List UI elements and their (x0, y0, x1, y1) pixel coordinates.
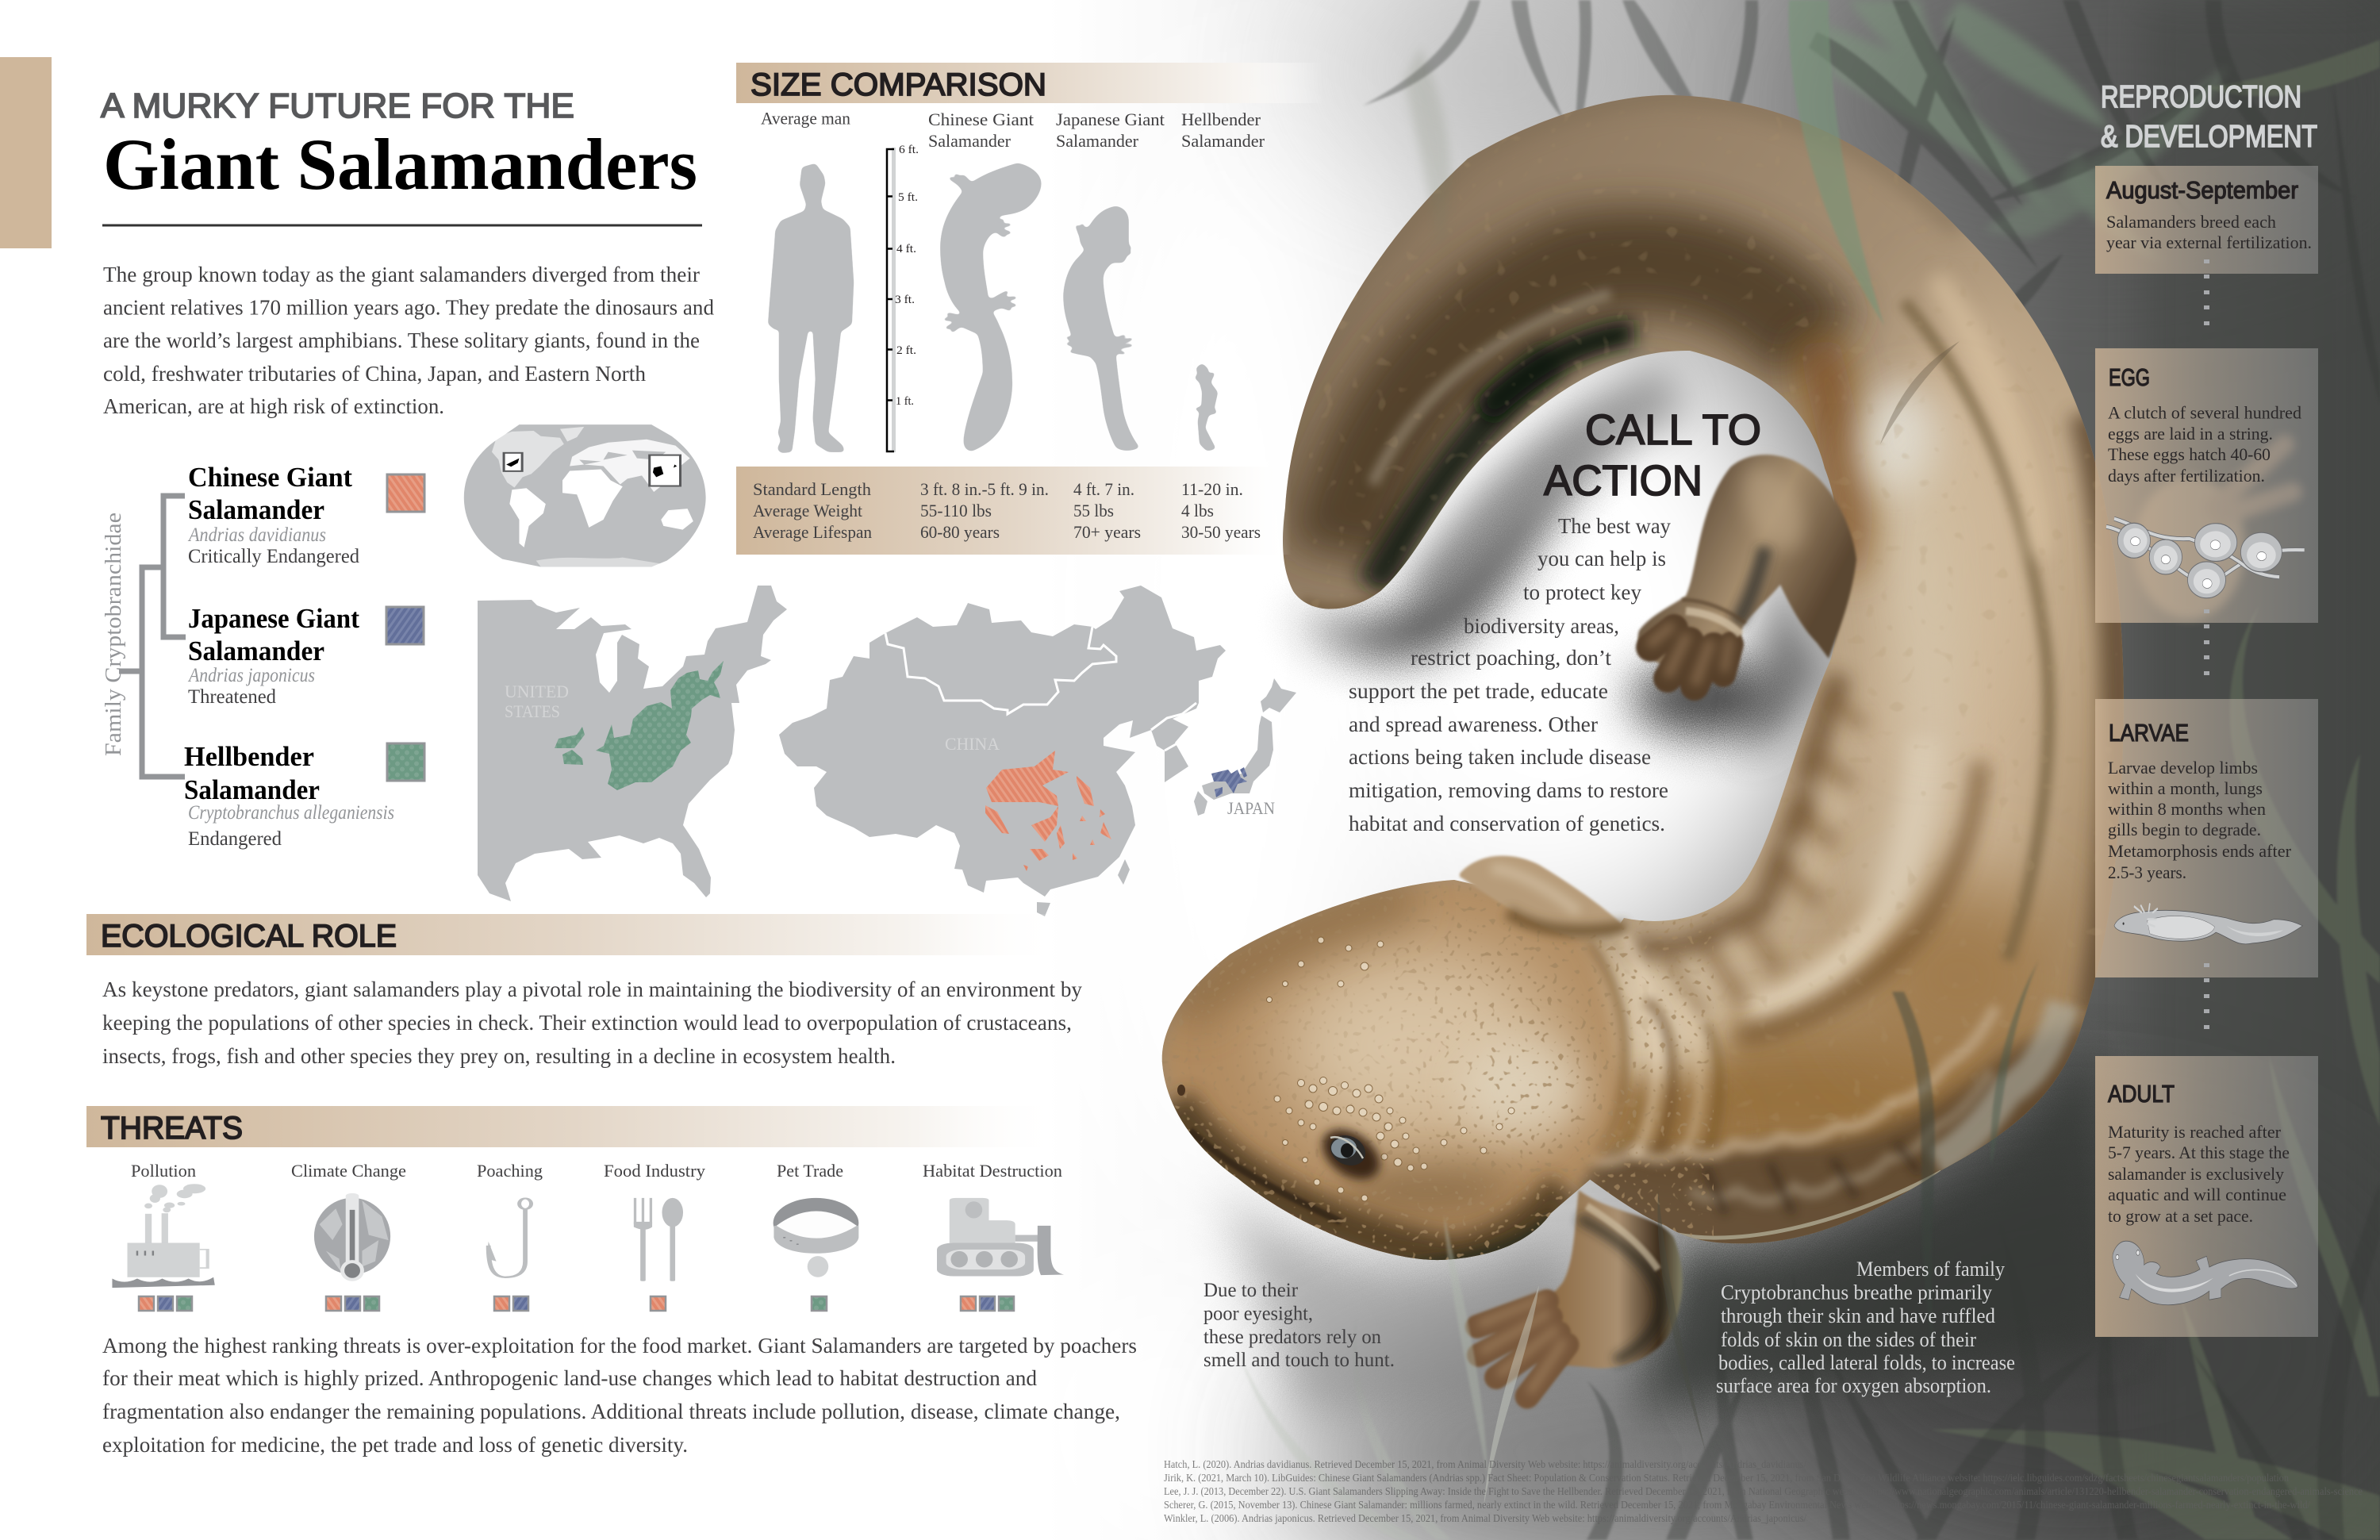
reproduction heading: REPRODUCTION (2101, 80, 2301, 114)
panel: Larvae: LARVAE (2109, 719, 2189, 747)
species: Hellbender Salamander: Salamander (184, 774, 320, 805)
head speckles (1142, 857, 1714, 1269)
panel: Larvae: Metamorphosis ends after (2108, 841, 2292, 861)
callout: lateral folds: Members of family (1856, 1258, 2005, 1281)
size statistics table: 3 ft. 8 in.-5 ft. 9 in. (920, 479, 1049, 499)
icon: fork and spoon (634, 1198, 683, 1281)
icon: collar (774, 1198, 858, 1277)
size comparison column labels: Japanese Giant (1056, 109, 1165, 129)
species: Japanese Giant Salamander: Andrias japonicus (187, 665, 315, 686)
foreground translucent grass (1404, 0, 2039, 1507)
panel: Egg (2095, 348, 2318, 623)
species: Japanese Giant Salamander: Threatened (188, 686, 276, 708)
icon: pollution factory (112, 1184, 215, 1288)
threats paragraph: Among the highest ranking threats is over-exploitation for the food market. Giant Salamanders are targeted by poachers (102, 1334, 1137, 1358)
intro paragraph: are the world’s largest amphibians. These solitary giants, found in the (103, 328, 700, 352)
species: Japanese Giant Salamander: Salamander (188, 636, 324, 666)
ecological role paragraph: As keystone predators, giant salamanders play a pivotal role in maintaining the biodiversity of an environment by (102, 977, 1082, 1001)
species: Chinese Giant Salamander: Andrias davidianus (187, 524, 326, 546)
call to action text: habitat and conservation of genetics. (1349, 812, 1665, 835)
height scale: 1 ft. (896, 395, 914, 408)
section heading: threats (86, 1106, 1062, 1147)
call to action heading (1544, 406, 1761, 505)
height scale (887, 144, 919, 452)
height scale: 4 ft. (896, 243, 916, 255)
height scale: 5 ft. (898, 191, 918, 204)
panel: August-September: year via external fertilization. (2106, 232, 2312, 252)
dark inner band along tail arc (1341, 261, 1817, 555)
callout: lateral folds: Cryptobranchus breathe primarily (1721, 1281, 1992, 1304)
Chinese giant salamander range (985, 751, 1111, 871)
background grass blades (1238, 0, 2380, 1540)
map: eastern United States: STATES (505, 701, 560, 721)
head shading (1162, 880, 1620, 1260)
silhouette: Hellbender (1192, 363, 1218, 451)
references (1164, 1459, 2363, 1525)
callout: eyesight: Due to their (1203, 1280, 1299, 1301)
icon: egg string (2106, 519, 2305, 598)
height scale: 6 ft. (899, 144, 919, 156)
icon: larva (2114, 903, 2302, 944)
size statistics table: Average Lifespan (753, 522, 872, 542)
panel: Adult (2095, 1056, 2318, 1337)
panel: August-September: August-September (2106, 176, 2298, 204)
size comparison column labels: Hellbender (1181, 109, 1261, 129)
size statistics table: 11-20 in. (1181, 479, 1243, 499)
silhouette: Japanese giant salamander (1063, 206, 1139, 451)
intro paragraph: ancient relatives 170 million years ago. They predate the dinosaurs and (103, 295, 714, 319)
shoulder lump (1460, 856, 1626, 938)
map: China (779, 586, 1226, 916)
call to action text: to protect key (1523, 581, 1641, 605)
shadows beneath salamander (1222, 389, 2126, 1412)
rear leg (1477, 1190, 1683, 1396)
size statistics table: 4 ft. 7 in. (1073, 479, 1134, 499)
ecological role paragraph (102, 977, 1082, 1068)
threat labels: Pet Trade (777, 1161, 843, 1181)
map: China: CHINA (945, 734, 1000, 754)
threats paragraph (102, 1334, 1137, 1457)
size statistics table: 55 lbs (1073, 501, 1114, 520)
size comparison column labels: Chinese Giant (928, 109, 1034, 129)
panel: Adult: Maturity is reached after (2108, 1122, 2282, 1142)
intro paragraph (103, 263, 714, 418)
left tan accent block (0, 57, 52, 248)
call to action text: The best way (1558, 514, 1671, 538)
Hellbender range (555, 661, 724, 790)
light warts around the eye (1266, 937, 1514, 1201)
map: eastern United States (478, 586, 787, 901)
reproduction heading: & DEVELOPMENT (2101, 120, 2317, 154)
species: Hellbender Salamander: Hellbender (184, 741, 314, 772)
panel: Egg: eggs are laid in a string. (2108, 424, 2273, 444)
section heading: ecological role (86, 914, 1062, 955)
map: Japan (1194, 678, 1296, 818)
panel: August-September: Salamanders breed each (2106, 212, 2276, 232)
threats paragraph: fragmentation also endanger the remaining populations. Additional threats include pollution, disease, climate change, (102, 1400, 1120, 1423)
size statistics table: 4 lbs (1181, 501, 1214, 520)
size comparison column labels: Salamander (1181, 131, 1265, 151)
references: Winkler, L. (2006). Andrias japonicus. Retrieved December 15, 2021, from Animal Diversity Web website: https://animaldiversity.org/accounts/Andrias_japonicus/ (1164, 1513, 1806, 1525)
references: Hatch, L. (2020). Andrias davidianus. Retrieved December 15, 2021, from Animal Diversity Web website: https://animaldiversity.org/accounts/Andrias_davidianus/ (1164, 1459, 1806, 1471)
height scale: 3 ft. (895, 294, 915, 306)
size statistics table (736, 467, 1292, 555)
threat species swatches (139, 1296, 1014, 1311)
threat labels: Climate Change (291, 1161, 406, 1181)
family tree bracket: Family Cryptobranchidae (101, 513, 126, 756)
section heading: size comparison: SIZE COMPARISON (750, 67, 1046, 102)
section heading: size comparison (736, 63, 1323, 103)
species: Hellbender Salamander (184, 741, 424, 850)
silhouette: average man (768, 163, 854, 453)
section heading: ecological role: ECOLOGICAL ROLE (101, 919, 397, 954)
panel: Larvae: within 8 months when (2108, 799, 2266, 819)
nostril (1177, 1085, 1185, 1096)
panel: Adult: salamander is exclusively (2108, 1164, 2284, 1184)
size statistics table: 55-110 lbs (920, 501, 992, 520)
ruffled lateral folds (1634, 674, 1841, 948)
family tree bracket (101, 496, 186, 777)
panel: Larvae: within a month, lungs (2108, 778, 2263, 798)
icon: bulldozer (937, 1198, 1064, 1276)
call to action text: and spread awareness. Other (1349, 712, 1598, 736)
panel: Adult: ADULT (2108, 1080, 2175, 1108)
salamander body and head (1161, 95, 2124, 1260)
map: eastern United States: UNITED (505, 682, 569, 701)
panel: Larvae: 2.5-3 years. (2108, 862, 2186, 882)
front leg (1638, 455, 1856, 686)
threats paragraph: for their meat which is highly prized. Anthropogenic land-use changes which lead to habitat destruction and (102, 1366, 1037, 1390)
call to action text: mitigation, removing dams to restore (1349, 778, 1668, 802)
intro paragraph: cold, freshwater tributaries of China, Japan, and Eastern North (103, 362, 647, 386)
intro paragraph: American, are at high risk of extinction. (103, 394, 444, 418)
map: Japan: JAPAN (1227, 798, 1275, 818)
size statistics table: Standard Length (753, 479, 871, 499)
callout: lateral folds (1716, 1258, 2015, 1397)
panel: August-September (2095, 166, 2318, 274)
panel: Egg: days after fertilization. (2108, 466, 2265, 486)
size comparison column labels: Salamander (928, 131, 1012, 151)
species: Chinese Giant Salamander: Salamander (188, 494, 324, 525)
panel: Egg: EGG (2109, 363, 2150, 391)
call to action text: you can help is (1537, 547, 1666, 570)
call to action heading: CALL TO (1585, 406, 1761, 454)
title: Giant Salamanders (103, 124, 697, 205)
timeline dots (2204, 259, 2209, 1029)
ecological role paragraph: insects, frogs, fish and other species they prey on, resulting in a decline in ecosystem health. (102, 1044, 896, 1068)
size statistics table: 30-50 years (1181, 522, 1261, 542)
size comparison column labels (761, 108, 1265, 151)
call to action text: restrict poaching, don’t (1411, 646, 1612, 670)
call to action text (1349, 514, 1671, 835)
threat labels (131, 1161, 1062, 1181)
panel: Adult: to grow at a set pace. (2108, 1206, 2253, 1226)
size statistics table: 60-80 years (920, 522, 1000, 542)
icon: fish hook (487, 1199, 532, 1277)
title: A MURKY FUTURE FOR THE (101, 86, 574, 125)
far rear foot seen through egg panel (2134, 444, 2293, 619)
threat labels: Habitat Destruction (923, 1161, 1062, 1181)
panel: Adult: 5-7 years. At this stage the (2108, 1143, 2290, 1162)
threat labels: Pollution (131, 1161, 196, 1181)
species: Chinese Giant Salamander (187, 462, 424, 567)
threats paragraph: exploitation for medicine, the pet trade and loss of genetic diversity. (102, 1433, 688, 1457)
size comparison column labels: Salamander (1056, 131, 1139, 151)
intro paragraph: The group known today as the giant salamanders diverged from their (103, 263, 700, 286)
call to action text: actions being taken include disease (1349, 745, 1651, 769)
eye (1313, 1119, 1389, 1189)
species: Japanese Giant Salamander: Japanese Giant (188, 603, 359, 634)
species: Hellbender Salamander: Endangered (188, 828, 282, 850)
silhouette: Chinese giant salamander (940, 163, 1041, 451)
threat labels: Food Industry (604, 1161, 705, 1181)
illustration: giant salamander (1111, 63, 2158, 1396)
section heading: threats: THREATS (101, 1111, 243, 1146)
ecological role paragraph: keeping the populations of other species in check. Their extinction would lead to overpopulation of crustaceans, (102, 1011, 1072, 1035)
call to action text: support the pet trade, educate (1349, 679, 1608, 703)
title (101, 86, 702, 227)
icon: adult salamander (2113, 1241, 2297, 1305)
outer edge shading (1285, 95, 1960, 508)
callout: eyesight: these predators rely on (1203, 1327, 1381, 1348)
callout: lateral folds: folds of skin on the sides of their (1721, 1328, 1976, 1351)
callout: eyesight: smell and touch to hunt. (1203, 1350, 1395, 1371)
height scale: 2 ft. (896, 344, 916, 357)
callout: lateral folds: through their skin and have ruffled (1721, 1304, 1995, 1327)
panel: Larvae: gills begin to degrade. (2108, 820, 2261, 839)
species: Hellbender Salamander: Cryptobranchus alleganiensis (188, 802, 394, 824)
callout: lateral folds: bodies, called lateral folds, to increase (1718, 1351, 2015, 1374)
panel: Adult: aquatic and will continue (2108, 1185, 2286, 1204)
species: Chinese Giant Salamander: Chinese Giant (188, 462, 352, 493)
threat labels: Poaching (477, 1161, 543, 1181)
icon: globe with thermometer (314, 1193, 390, 1281)
call to action heading: ACTION (1544, 457, 1702, 505)
callout: eyesight (1203, 1280, 1395, 1371)
size comparison column labels: Average man (761, 108, 850, 129)
species: Japanese Giant Salamander (187, 603, 424, 708)
body speckles (1309, 95, 2118, 1206)
panel: Larvae: Larvae develop limbs (2108, 758, 2258, 778)
callout: eyesight: poor eyesight, (1203, 1303, 1313, 1325)
call to action text: biodiversity areas, (1464, 614, 1619, 638)
reproduction heading (2101, 80, 2317, 154)
callout: lateral folds: surface area for oxygen absorption. (1716, 1374, 1991, 1397)
panel: Egg: These eggs hatch 40-60 (2108, 444, 2271, 464)
world locator map (464, 424, 706, 567)
neck folds (1587, 928, 1720, 1158)
panel: Egg: A clutch of several hundred (2108, 403, 2301, 422)
size statistics table: 70+ years (1073, 522, 1141, 542)
species: Chinese Giant Salamander: Critically Endangered (188, 546, 359, 567)
panel: Larvae (2095, 699, 2318, 977)
size statistics table: Average Weight (753, 501, 862, 520)
